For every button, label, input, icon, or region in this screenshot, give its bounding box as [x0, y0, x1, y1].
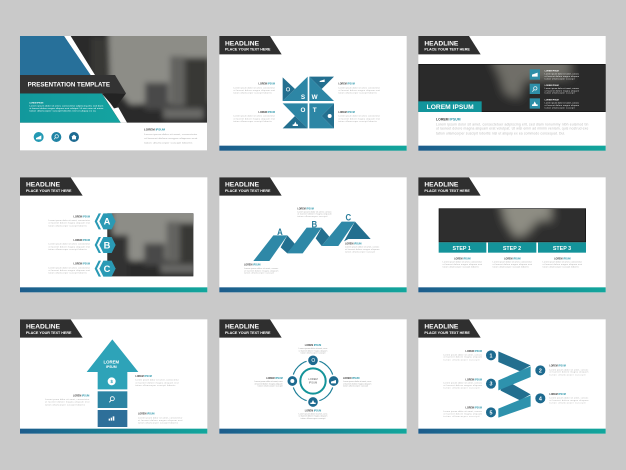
cover text block: LOREM IPSUM	[144, 127, 166, 131]
numbered circles: 1	[490, 353, 493, 359]
text A: tation ullamcorper suscipit lobortis	[48, 224, 88, 227]
numbered circles: 2	[539, 368, 542, 374]
step 2 text: Lorem ipsum dolor sit amet, consectetur	[493, 260, 532, 263]
text C: ut laoreet dolore magna aliquam erat	[48, 269, 90, 272]
zigzag ribbon: B	[311, 219, 317, 229]
text right: tation ullamcorper suscipit	[345, 250, 375, 253]
footer bar	[418, 287, 606, 292]
body text: ut laoreet dolore magna aliquam erat volutpat. Ut wisi enim ad minim veniam, quis nostrud exe	[436, 127, 588, 131]
icon list: tation ullamcorper suscipit	[545, 92, 575, 95]
arrow head block: $	[110, 379, 113, 384]
text right: LOREM IPSUM	[345, 243, 361, 245]
text left	[254, 378, 284, 388]
text: opportunities: ut laoreet dolore magna aliquam erat	[233, 117, 275, 120]
hexagon A: A	[104, 217, 111, 227]
text left: Lorem ipsum dolor sit amet, consectetur	[45, 398, 90, 401]
text: threats: Lorem ipsum dolor sit amet, consectetur	[338, 115, 380, 118]
headline tab	[418, 36, 481, 54]
step 3 text: tation ullamcorper suscipit lobortis	[543, 266, 580, 269]
photo	[438, 208, 586, 242]
text right bottom: tation ullamcorper suscipit lobortis	[138, 422, 179, 425]
text B: LOREM IPSUM	[74, 240, 90, 242]
text right: tation ullamcorper suscipit	[343, 385, 368, 388]
step 2 text: ut laoreet dolore magna aliquam erat	[493, 263, 532, 266]
text bottom	[299, 411, 328, 420]
icon list	[530, 69, 579, 109]
icon: chart circle	[34, 132, 44, 142]
text top	[297, 208, 333, 218]
text left: LOREM IPSUM	[266, 378, 283, 380]
text 5: Lorem ipsum dolor sit amet, consec	[443, 410, 483, 413]
text 5: LOREM IPSUM	[466, 408, 482, 410]
headline tab	[20, 319, 83, 338]
text B: tation ullamcorper suscipit lobortis	[48, 248, 88, 251]
SWOT diagram	[283, 77, 334, 128]
icon: search circle	[51, 132, 61, 142]
headline tab: PLACE YOUR TEXT HERE	[225, 189, 271, 193]
text: weaknesses: tation ullamcorper suscipit lobortis	[338, 92, 378, 95]
white diagonal stripes	[64, 36, 127, 123]
slide 5: zigzag ribbon	[219, 177, 407, 292]
arrow head block: IPSUM	[106, 365, 117, 369]
dark fold	[102, 93, 126, 108]
text left: ut laoreet dolore magna aliquam erat	[45, 401, 90, 404]
step 1	[439, 242, 486, 253]
step 3	[538, 242, 586, 253]
text left: tation ullamcorper suscipit	[244, 272, 274, 275]
text right	[345, 243, 380, 253]
headline tab: PLACE YOUR TEXT HERE	[225, 331, 271, 335]
step 3: STEP 3	[553, 246, 571, 252]
headline tab: PLACE YOUR TEXT HERE	[424, 48, 470, 52]
step 3 text: LOREM IPSUM	[554, 258, 571, 260]
numbered circles	[486, 350, 545, 417]
text left: tation ullamcorper suscipit lobortis	[45, 403, 86, 406]
hexagon B	[95, 237, 116, 253]
icon list: tation ullamcorper suscipit	[545, 106, 575, 109]
headline tab: PLACE YOUR TEXT HERE	[424, 189, 470, 193]
numbered circles: 5	[490, 410, 493, 416]
icon list: Lorem ipsum dolor sit amet, consec	[545, 87, 579, 90]
text 3: Lorem ipsum dolor sit amet, consec	[443, 382, 483, 385]
text: opportunities: LOREM IPSUM	[259, 112, 275, 114]
body text: tation ullamcorper suscipit lobortis nisl ut aliquip ex ea commodo consequat. Dui.	[436, 132, 565, 136]
text C: Lorem ipsum dolor sit amet, consectetur	[48, 266, 90, 269]
text 2: ut laoreet dolore magna aliquam	[549, 371, 589, 374]
text: weaknesses: ut laoreet dolore magna aliquam erat	[338, 89, 380, 92]
icon list: Lorem ipsum dolor sit amet, consec	[545, 73, 579, 76]
text right: Lorem ipsum dolor sit amet, cons	[343, 380, 372, 383]
text left: LOREM IPSUM	[244, 265, 260, 267]
text: strengths: Lorem ipsum dolor sit amet, consectetur	[233, 86, 275, 89]
step 2 text: tation ullamcorper suscipit lobortis	[493, 266, 530, 269]
teal panel text: tation ullamcorper suscipit lobortis nisl ut aliquip ex ea	[29, 110, 97, 113]
text 3	[443, 379, 483, 390]
footer bar	[418, 146, 606, 151]
text: strengths: tation ullamcorper suscipit lobortis	[233, 92, 273, 95]
text 1: Lorem ipsum dolor sit amet, consec	[443, 353, 483, 356]
text B: Lorem ipsum dolor sit amet, consectetur	[48, 243, 90, 246]
text: weaknesses: Lorem ipsum dolor sit amet, consectetur	[338, 86, 380, 89]
teal panel text	[29, 102, 104, 113]
zigzag ribbon: A	[277, 227, 283, 237]
text left: ut laoreet dolore magna aliquam	[244, 269, 279, 272]
teal panel text: Lorem ipsum dolor sit amet, consectetur adipiscing elit, sed diam	[29, 104, 104, 107]
cover text block: ut laoreet dolore magna aliquam erat	[144, 137, 198, 140]
circle diagram: LOREM	[308, 377, 318, 381]
SWOT diagram: S	[301, 94, 305, 101]
circle diagram	[287, 355, 339, 408]
text: opportunities	[233, 112, 275, 123]
slide 8: circular diagram	[219, 319, 407, 434]
headline tab: PLACE YOUR TEXT HERE	[424, 331, 470, 335]
cover text block: Lorem ipsum dolor sit amet, consectetur	[144, 133, 198, 136]
text 3: ut laoreet dolore magna aliquam	[443, 384, 482, 387]
arrow head block	[87, 339, 138, 389]
text: threats: tation ullamcorper suscipit lobortis	[338, 120, 378, 123]
step 3 text	[543, 258, 582, 269]
cover text block	[144, 127, 198, 144]
numbered circles: 3	[490, 382, 493, 388]
icon list: ut laoreet dolore magna aliquam	[545, 89, 579, 92]
text right: ut laoreet dolore magna aliquam	[343, 382, 372, 385]
headline tab: HEADLINE	[424, 182, 459, 189]
text: weaknesses: LOREM IPSUM	[338, 84, 355, 86]
footer bar	[219, 287, 407, 292]
headline tab: HEADLINE	[26, 182, 61, 189]
teal panel text: ut laoreet dolore magna aliquam erat volutpat. Ut wisi enim ad minim	[29, 107, 104, 110]
cover title: PRESENTATION TEMPLATE	[28, 82, 111, 89]
step 2: STEP 2	[503, 246, 521, 252]
text left	[45, 395, 90, 406]
text 5: tation ullamcorper suscipit	[443, 415, 480, 418]
icon list: Lorem ipsum dolor sit amet, consec	[545, 102, 579, 105]
text A: Lorem ipsum dolor sit amet, consectetur	[48, 219, 90, 222]
step 3 text: Lorem ipsum dolor sit amet, consectetur	[543, 260, 582, 263]
headline tab: HEADLINE	[225, 182, 260, 189]
text 3: LOREM IPSUM	[466, 379, 482, 381]
icon list: LOREM IPSUM	[545, 71, 559, 73]
icon list: tation ullamcorper suscipit	[545, 77, 575, 80]
search block	[98, 391, 127, 408]
text right: Lorem ipsum dolor sit amet, consec	[345, 246, 380, 249]
cover text block: tation ullamcorper suscipit lobortis	[144, 141, 194, 144]
headline tab	[219, 319, 282, 338]
text 5	[443, 408, 483, 418]
text 1: ut laoreet dolore magna aliquam	[443, 356, 482, 359]
SWOT diagram: O	[301, 107, 306, 114]
text left: ut laoreet dolore magna aliquam	[254, 382, 283, 385]
step 2	[488, 242, 536, 253]
text C	[48, 264, 90, 275]
text left: LOREM IPSUM	[73, 395, 89, 397]
text left	[244, 265, 279, 275]
numbered circles: 4	[539, 396, 542, 402]
text 2: tation ullamcorper suscipit	[549, 373, 586, 376]
text left: tation ullamcorper suscipit	[258, 385, 283, 388]
teal panel text: LOREM IPSUM	[29, 102, 44, 104]
text: threats: ut laoreet dolore magna aliquam erat	[338, 117, 380, 120]
step 1: STEP 1	[453, 246, 471, 252]
step 2 text: LOREM IPSUM	[504, 258, 521, 260]
slide 7: stacked arrow	[20, 319, 207, 434]
text top: Lorem ipsum dolor sit amet, consec	[297, 210, 333, 213]
text 3: tation ullamcorper suscipit	[443, 387, 480, 390]
text right bottom: LOREM IPSUM	[138, 414, 154, 416]
headline tab: HEADLINE	[225, 40, 260, 47]
text B: ut laoreet dolore magna aliquam erat	[48, 245, 90, 248]
footer bar	[20, 429, 207, 434]
arrow head block: LOREM	[104, 360, 120, 365]
step 1 text: LOREM IPSUM	[454, 258, 471, 260]
text: strengths	[233, 84, 275, 95]
photo banner	[418, 64, 606, 112]
slide 4: A B C hexagons with photo	[20, 177, 211, 292]
text right top: ut laoreet dolore magna aliquam erat	[135, 381, 179, 384]
headline tab	[418, 319, 481, 338]
text 2	[549, 366, 589, 376]
hexagon C	[95, 261, 116, 277]
text 4	[549, 394, 589, 405]
text right top: tation ullamcorper suscipit lobortis	[135, 384, 176, 387]
step 1 text: Lorem ipsum dolor sit amet, consectetur	[443, 260, 482, 263]
headline tab	[219, 177, 282, 196]
headline tab: HEADLINE	[424, 324, 459, 331]
text top: Lorem ipsum dolor sit amet, cons	[299, 347, 328, 350]
text right top	[135, 376, 179, 387]
headline tab	[20, 177, 83, 196]
zigzag ribbon	[253, 212, 371, 261]
slide 3: photo banner with icon list	[410, 36, 613, 151]
body text	[436, 118, 588, 136]
text right	[343, 378, 372, 388]
text: weaknesses	[338, 84, 380, 95]
hexagon C: C	[104, 264, 111, 274]
headline tab	[219, 36, 282, 54]
headline tab: HEADLINE	[225, 324, 260, 331]
text: threats	[338, 112, 380, 123]
headline tab: PLACE YOUR TEXT HERE	[225, 48, 271, 52]
text bottom: ut laoreet dolore magna aliquam	[299, 415, 328, 418]
text A: LOREM IPSUM	[74, 216, 90, 218]
text top: tation ullamcorper suscipit	[301, 352, 326, 355]
teal panel	[20, 93, 121, 123]
text top: tation ullamcorper suscipit	[297, 215, 328, 218]
text 4: LOREM IPSUM	[549, 394, 566, 396]
icon list: ut laoreet dolore magna aliquam	[545, 104, 579, 107]
text 5: ut laoreet dolore magna aliquam	[443, 412, 482, 415]
icon list: ut laoreet dolore magna aliquam	[545, 75, 579, 78]
step 1 text: tation ullamcorper suscipit lobortis	[443, 266, 480, 269]
text: strengths: LOREM IPSUM	[259, 84, 275, 86]
text: opportunities: tation ullamcorper suscipit lobortis	[233, 120, 273, 123]
photo	[107, 213, 194, 276]
zigzag ribbon: C	[345, 212, 351, 222]
headline tab: HEADLINE	[26, 324, 61, 331]
text 1: tation ullamcorper suscipit	[443, 358, 480, 361]
step 3 text: ut laoreet dolore magna aliquam erat	[543, 263, 582, 266]
headline tab: HEADLINE	[424, 40, 459, 47]
step 2 text	[493, 258, 532, 269]
slide 6: three steps	[418, 177, 606, 292]
text left: Lorem ipsum dolor sit amet, consec	[244, 267, 279, 270]
text: threats: LOREM IPSUM	[338, 112, 355, 114]
text C: tation ullamcorper suscipit lobortis	[48, 272, 88, 275]
text 2: LOREM IPSUM	[549, 366, 566, 368]
text: opportunities: Lorem ipsum dolor sit amet, consectetur	[233, 115, 275, 118]
footer bar	[219, 146, 407, 151]
icon list: LOREM IPSUM	[545, 100, 559, 102]
chart block	[98, 410, 127, 427]
headline tab	[418, 177, 481, 196]
text right bottom: ut laoreet dolore magna aliquam erat	[138, 419, 183, 422]
footer bar	[219, 429, 407, 434]
text B	[48, 240, 90, 251]
text 1	[443, 351, 483, 361]
text top: ut laoreet dolore magna aliquam	[297, 213, 332, 216]
hexagon B: B	[104, 240, 111, 250]
text right bottom	[138, 414, 183, 425]
text right bottom: Lorem ipsum dolor sit amet, consectetur	[138, 416, 183, 419]
text A: ut laoreet dolore magna aliquam erat	[48, 222, 90, 225]
footer bar	[418, 429, 606, 434]
footer bar	[20, 287, 207, 292]
text top: ut laoreet dolore magna aliquam	[299, 349, 328, 352]
text right: LOREM IPSUM	[343, 378, 359, 380]
text left: Lorem ipsum dolor sit amet, cons	[254, 380, 284, 383]
SWOT diagram: T	[313, 107, 317, 114]
cover photo	[20, 36, 207, 123]
step 1 text	[443, 258, 482, 269]
title band	[20, 75, 126, 93]
icon: home circle	[69, 132, 79, 142]
slide 1: presentation template cover	[20, 36, 207, 150]
text 4: Lorem ipsum dolor sit amet, consec	[549, 397, 589, 400]
text right top: LOREM IPSUM	[135, 376, 152, 378]
text 2: Lorem ipsum dolor sit amet, consec	[549, 368, 589, 371]
text 1: LOREM IPSUM	[466, 351, 482, 353]
text top: LOREM IPSUM	[305, 345, 321, 347]
teal label: LOREM IPSUM	[427, 104, 474, 111]
circle diagram: IPSUM	[309, 381, 317, 385]
zigzag ribbon	[498, 351, 531, 418]
text A	[48, 216, 90, 227]
text top	[299, 345, 328, 355]
text top: LOREM IPSUM	[297, 208, 314, 210]
icon list: LOREM IPSUM	[545, 85, 559, 87]
text bottom: LOREM IPSUM	[305, 411, 321, 413]
text 4: tation ullamcorper suscipit	[549, 402, 586, 405]
slide 2: SWOT pinwheel	[219, 36, 407, 151]
headline tab: PLACE YOUR TEXT HERE	[26, 189, 72, 193]
slide 9: numbered zigzag	[418, 319, 606, 434]
text C: LOREM IPSUM	[74, 264, 90, 266]
text right top: Lorem ipsum dolor sit amet, consectetur	[135, 379, 179, 382]
body text: Lorem ipsum dolor sit amet, consectetuer adipiscing elit, sed diam nonummy nibh euismod tin	[436, 122, 588, 126]
teal label	[418, 101, 482, 112]
hexagon A	[95, 213, 116, 229]
text 4: ut laoreet dolore magna aliquam	[549, 399, 589, 402]
SWOT diagram: W	[312, 94, 318, 101]
blue panel	[20, 36, 91, 75]
body text: LOREM IPSUM	[436, 118, 461, 122]
text bottom: Lorem ipsum dolor sit amet, cons	[299, 412, 328, 415]
text right: ut laoreet dolore magna aliquam	[345, 248, 380, 251]
step 1 text: ut laoreet dolore magna aliquam erat	[443, 263, 482, 266]
headline tab: PLACE YOUR TEXT HERE	[26, 331, 72, 335]
text: strengths: ut laoreet dolore magna aliquam erat	[233, 89, 275, 92]
text bottom: tation ullamcorper suscipit	[301, 417, 326, 420]
